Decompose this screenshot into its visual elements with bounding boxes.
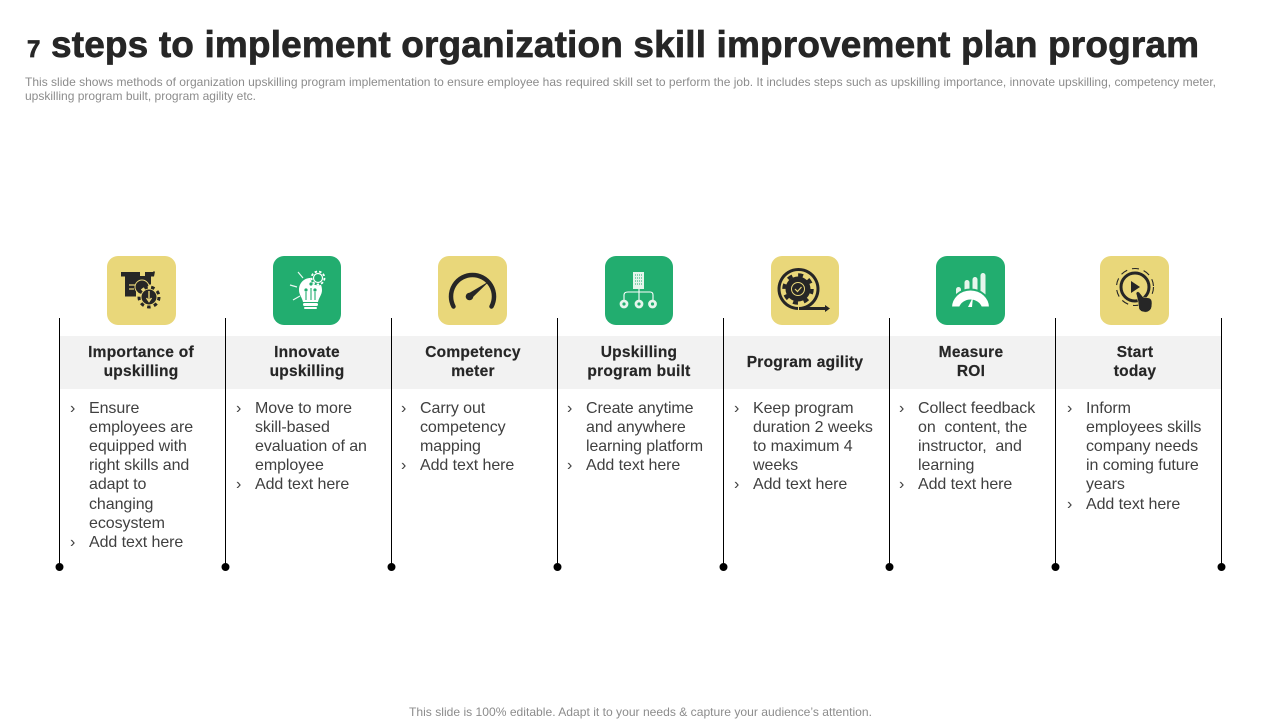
bullet list: Ensure: [89, 400, 139, 417]
bullet list: to maximum 4: [753, 438, 853, 455]
title: steps to implement organization skill improvement plan program: [51, 24, 1199, 65]
bullet list: ›: [401, 457, 406, 474]
heading: Importance of: [88, 344, 194, 361]
panel: step 6 measure ROI: [899, 256, 1036, 493]
heading: Program agility: [747, 354, 863, 371]
bullet list: Add text here: [753, 476, 847, 493]
heading: [1114, 344, 1156, 380]
icon: gear with arrow: [771, 256, 839, 325]
heading: [587, 344, 691, 380]
bullet list: ›: [1067, 496, 1072, 513]
bullet list: years: [1086, 476, 1125, 493]
bullet list: ›: [236, 400, 241, 417]
panel: step 4 upskilling program built: [567, 256, 703, 474]
bullet list: weeks: [752, 457, 798, 474]
bullet list: Add text here: [1086, 496, 1180, 513]
bullet list: competency: [420, 419, 506, 436]
heading: [425, 344, 521, 380]
bullet list: Carry out: [420, 400, 486, 417]
bullet list: Inform: [1086, 400, 1131, 417]
heading: program built: [587, 363, 691, 380]
panel: step 2 innovate upskilling: [236, 256, 367, 493]
panel: step 3 competency meter: [401, 256, 521, 474]
heading: Start: [1117, 344, 1153, 361]
bullet list: Add text here: [586, 457, 680, 474]
bullet list: in coming future: [1086, 457, 1199, 474]
heading: [270, 344, 344, 380]
panel: step 7 start today: [1067, 256, 1201, 513]
bullet list: [734, 400, 873, 493]
subtitle description: [25, 75, 1216, 103]
bullet list: ›: [70, 400, 75, 417]
timeline dividers: [56, 318, 1225, 570]
heading: Competency: [425, 344, 521, 361]
bullet list: ›: [236, 476, 241, 493]
bullet list: ›: [1067, 400, 1072, 417]
subtitle description: This slide shows methods of organization upskilling program implementation to ensure employee has required skill set to perform the job. It includes steps such as upskilling importance, innovate upskilling, competency meter,: [25, 75, 1216, 89]
bullet list: employees skills: [1086, 419, 1201, 436]
bullet list: equipped with: [89, 438, 187, 455]
bullet list: [236, 400, 367, 493]
bullet list: ›: [734, 476, 739, 493]
heading: [88, 344, 194, 380]
bullet list: Add text here: [918, 476, 1012, 493]
bullet list: Keep program: [753, 400, 854, 417]
heading: ROI: [957, 363, 985, 380]
bullet list: ›: [567, 457, 572, 474]
bullet list: [567, 400, 703, 474]
bullet list: ›: [401, 400, 406, 417]
panel: step 5 program agility: [734, 256, 873, 493]
heading: upskilling: [104, 363, 178, 380]
bullet list: learning: [918, 457, 974, 474]
icon: speedometer: [438, 256, 507, 325]
bullet list: Add text here: [420, 457, 514, 474]
icon: gauge and bars: [936, 256, 1005, 325]
bullet list: Add text here: [255, 476, 349, 493]
bullet list: Add text here: [89, 534, 183, 551]
bullet list: ›: [899, 476, 904, 493]
bullet list: [899, 400, 1036, 493]
bullet list: changing: [89, 496, 153, 513]
heading band: [59, 336, 1221, 389]
icon: play button with hand: [1100, 256, 1169, 325]
bullet list: ›: [734, 400, 739, 417]
icon: document and gears: [107, 256, 176, 325]
heading: [939, 344, 1003, 380]
bullet list: on content, the: [918, 419, 1027, 436]
bullet list: instructor, and: [918, 438, 1022, 455]
bullet list: Move to more: [255, 400, 352, 417]
heading: meter: [451, 363, 495, 380]
bullet list: evaluation of an: [255, 438, 367, 455]
bullet list: [1067, 400, 1201, 513]
bullet list: learning platform: [586, 438, 703, 455]
bullet list: employee: [255, 457, 324, 474]
subtitle description: upskilling program built, program agility etc.: [25, 89, 256, 103]
bullet list: skill-based: [255, 419, 330, 436]
bullet list: ›: [567, 400, 572, 417]
bullet list: mapping: [420, 438, 481, 455]
bullet list: ecosystem: [89, 515, 165, 532]
title: 7: [27, 36, 40, 63]
bullet list: ›: [899, 400, 904, 417]
bullet list: company needs: [1086, 438, 1198, 455]
bullet list: ›: [70, 534, 75, 551]
bullet list: duration 2 weeks: [753, 419, 873, 436]
bullet list: [70, 400, 193, 551]
icon: light bulb with gear: [273, 256, 341, 325]
bullet list: adapt to: [89, 476, 146, 493]
bullet list: Create anytime: [586, 400, 694, 417]
heading: Measure: [939, 344, 1003, 361]
heading: Innovate: [274, 344, 340, 361]
bullet list: and anywhere: [586, 419, 686, 436]
panel: step 1 importance of upskilling: [70, 256, 194, 551]
heading: today: [1114, 363, 1156, 380]
bullet list: [401, 400, 514, 474]
heading: Upskilling: [601, 344, 677, 361]
bullet list: Collect feedback: [918, 400, 1036, 417]
bullet list: employees are: [89, 419, 193, 436]
icon: building network: [605, 256, 673, 325]
bullet list: right skills and: [89, 457, 189, 474]
heading: upskilling: [270, 363, 344, 380]
footer note: This slide is 100% editable. Adapt it to your needs & capture your audience’s attention.: [409, 705, 872, 719]
